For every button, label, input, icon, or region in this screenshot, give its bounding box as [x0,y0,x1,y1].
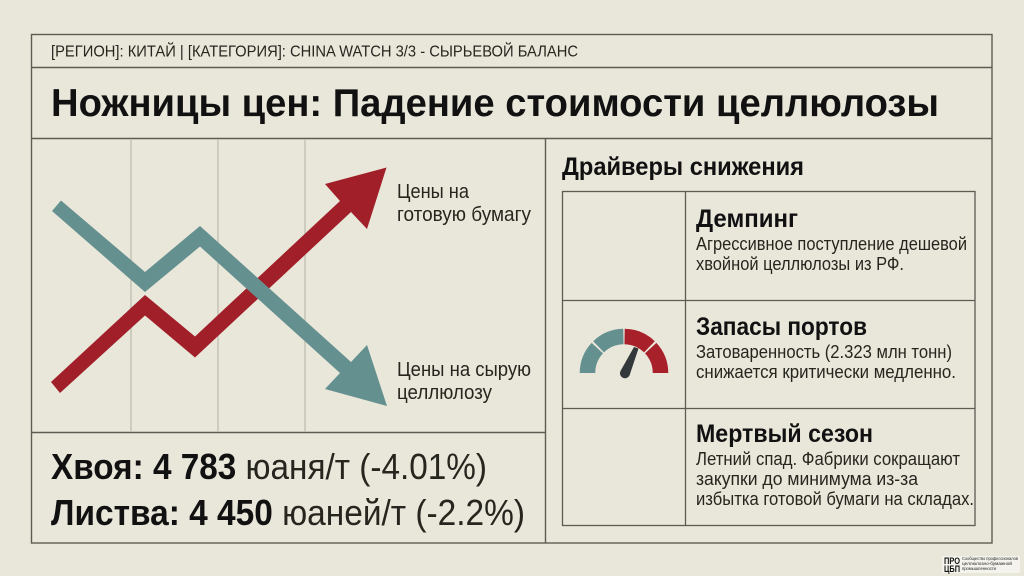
arrow: raw pulp prices (falling) [52,200,387,406]
driver: dumping: хвойной целлюлозы из РФ. [696,254,904,274]
logo: Сообщество профессионалов [962,556,1019,561]
panel: prices [51,446,525,533]
label: raw pulp prices: Цены на сырую [397,359,531,381]
driver: dead season: избытка готовой бумаги на складах. [696,489,974,509]
driver: dead season: закупки до минимума из-за [696,469,919,489]
driver: dead season: Мертвый сезон [696,420,873,448]
driver: dumping: Агрессивное поступление дешевой [696,234,967,254]
driver: port stocks: Затоваренность (2.323 млн тонн) [696,342,952,362]
label: raw pulp prices [397,359,531,404]
label: finished paper prices: готовую бумагу [397,204,531,226]
label: finished paper prices [397,181,531,226]
heading: drivers: Драйверы снижения [562,153,804,181]
panel: drivers table [562,191,975,526]
driver: port stocks [696,313,956,382]
logo: ПРО [944,556,960,566]
icon: gauge [588,336,660,378]
title: Ножницы цен: Падение стоимости целлюлозы [51,82,939,125]
logo [942,556,1020,574]
label: finished paper prices: Цены на [397,181,470,203]
header tag line: [РЕГИОН]: КИТАЙ | [КАТЕГОРИЯ]: CHINA WATCH 3/3 - СЫРЬЕВОЙ БАЛАНС [51,42,578,60]
arrow: finished paper prices (rising) [51,168,386,393]
driver: dead season: Летний спад. Фабрики сокращают [696,449,960,469]
driver: dumping [696,205,967,274]
driver: port stocks: Запасы портов [696,313,867,341]
hardwood price: Листва: 4 450 юаней/т (-2.2%) [51,492,525,533]
driver: dumping: Демпинг [696,205,798,233]
softwood price: Хвоя: 4 783 юаня/т (-4.01%) [51,446,487,487]
panel: price scissors chart [51,139,531,432]
logo: промышленности [962,566,996,571]
driver: port stocks: снижается критически медленно. [696,362,956,382]
driver: dead season [696,420,974,509]
logo: ЦБП [944,564,960,574]
label: raw pulp prices: целлюлозу [397,382,492,404]
logo: целлюлозно-бумажной [962,560,1013,566]
